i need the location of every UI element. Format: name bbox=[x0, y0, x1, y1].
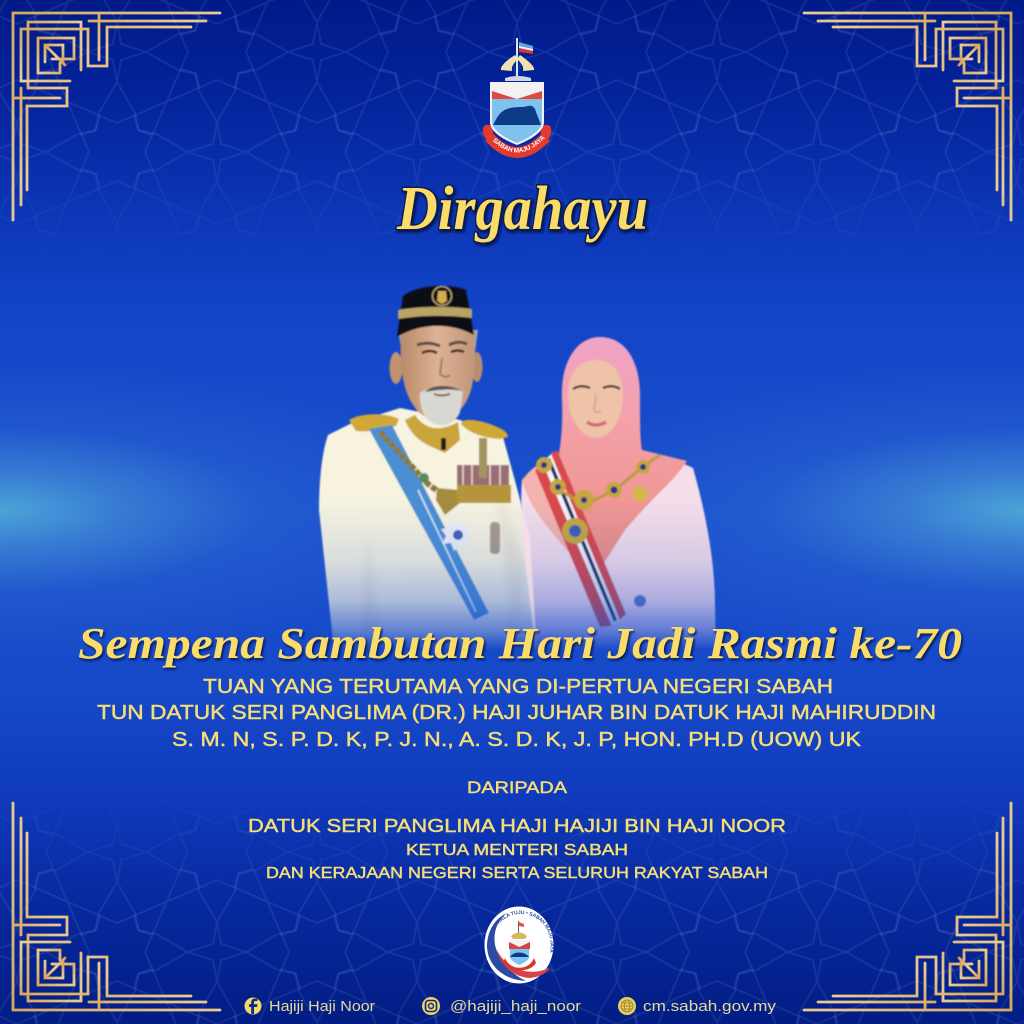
gold chain and medals bbox=[536, 455, 660, 607]
arm shading bbox=[502, 512, 522, 598]
heading: Dirgahayu: Dirgahayu bbox=[396, 175, 648, 243]
corner ornament: bottom right bbox=[804, 803, 1011, 1010]
side medal bbox=[490, 522, 500, 554]
corner ornament: top right bbox=[804, 13, 1011, 220]
icon: Sabah state crest: SABAH MAJU JAYA bbox=[493, 136, 545, 152]
text block: sender: DATUK SERI PANGLIMA HAJI HAJIJI BIN HAJI NOOR bbox=[248, 815, 786, 836]
text block: sender: KETUA MENTERI SABAH bbox=[406, 842, 628, 859]
chain of honour bbox=[377, 430, 438, 494]
footer: social links bbox=[244, 997, 777, 1015]
jacket bbox=[319, 408, 537, 650]
medal ribbons bbox=[457, 438, 511, 503]
face bbox=[568, 360, 623, 438]
blue sash bbox=[369, 425, 489, 620]
text: daripada: DARIPADA bbox=[467, 778, 568, 797]
ears and hair bbox=[390, 352, 402, 384]
icon: website globe bbox=[618, 997, 636, 1015]
tri-colour sash bbox=[535, 452, 624, 628]
cap bbox=[397, 286, 474, 337]
text block: recipient titles: TUN DATUK SERI PANGLIMA (DR.) HAJI JUHAR BIN DATUK HAJI MAHIRUDDIN bbox=[97, 702, 936, 724]
text block: recipient titles: S. M. N, S. P. D. K, P. J. N., A. S. D. K, J. P, HON. PH.D (UOW) UK bbox=[172, 729, 862, 751]
text block: sender: DAN KERAJAAN NEGERI SERTA SELURUH RAKYAT SABAH bbox=[266, 865, 768, 882]
hijab bbox=[555, 337, 687, 563]
corner ornament: bottom left bbox=[13, 803, 220, 1010]
icon: Hala Tuju logo bbox=[484, 906, 554, 984]
icon: facebook bbox=[244, 998, 262, 1014]
icon: Hala Tuju logo: HALA TUJU • SABAH MAJU JAYA bbox=[497, 910, 554, 952]
corner ornament: top left bbox=[13, 13, 220, 220]
text block: sender bbox=[248, 815, 786, 882]
text block: recipient titles bbox=[97, 676, 936, 751]
text: website: cm.sabah.gov.my bbox=[643, 998, 777, 1015]
eyes and brows bbox=[417, 342, 467, 346]
text: instagram handle: @hajiji_haji_noor bbox=[450, 998, 581, 1015]
baju dress bbox=[521, 462, 716, 650]
text: facebook name: Hajiji Haji Noor bbox=[269, 998, 375, 1015]
portrait: Tun Juhar bbox=[319, 286, 537, 650]
epaulettes bbox=[349, 414, 399, 431]
face bbox=[401, 325, 475, 419]
icon: Sabah state crest bbox=[482, 38, 552, 158]
portrait: Toh Puan bbox=[521, 337, 716, 650]
star medal bbox=[441, 519, 473, 551]
icon: instagram bbox=[422, 997, 440, 1015]
text block: recipient titles: TUAN YANG TERUTAMA YANG DI-PERTUA NEGERI SABAH bbox=[203, 676, 833, 698]
heading: Sempena Sambutan: Sempena Sambutan Hari Jadi Rasmi ke-70 bbox=[78, 619, 962, 668]
moustache and beard bbox=[420, 387, 463, 425]
gold collar bbox=[405, 415, 460, 453]
